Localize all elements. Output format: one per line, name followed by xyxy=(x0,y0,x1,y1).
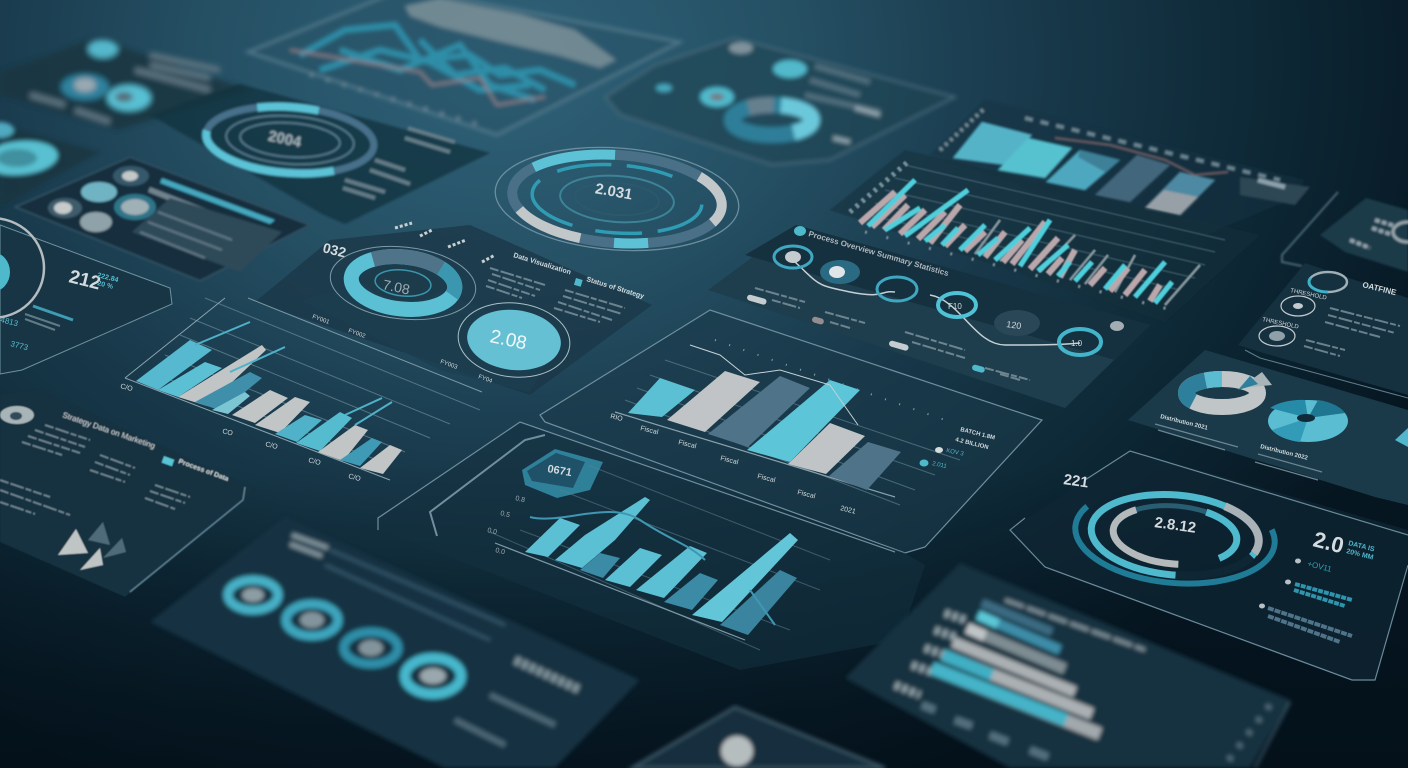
panel: left stats: 222.84 xyxy=(97,272,119,284)
trend lines xyxy=(195,322,392,425)
node 6 xyxy=(1059,329,1101,355)
scale dots xyxy=(850,160,910,212)
stat: 2.0 xyxy=(1311,527,1347,558)
panel: left stats: 20 % xyxy=(97,280,114,291)
panel: central bar chart: Fiscal xyxy=(720,455,739,466)
panel: donut and big dial: FY002 xyxy=(347,328,367,340)
key xyxy=(162,456,174,466)
panel: central bar chart: Fiscal xyxy=(640,425,659,436)
rings xyxy=(1071,478,1279,592)
pie 1 xyxy=(1186,372,1272,407)
tag xyxy=(1240,177,1310,205)
panel: central bar chart: Fiscal xyxy=(797,489,816,500)
pie 2 xyxy=(1268,400,1348,442)
node 3 xyxy=(877,277,917,301)
notes block one: Data Visualization xyxy=(512,252,572,276)
axis labels: FY001 xyxy=(311,314,331,326)
pink spikes xyxy=(860,192,1160,301)
heading xyxy=(290,535,328,556)
axis labels: RIO xyxy=(610,413,624,423)
panel: bottom partial card xyxy=(632,707,885,768)
gray spikes xyxy=(930,215,1200,305)
x labels xyxy=(922,705,1048,757)
legend: BATCH 1.8M xyxy=(960,427,995,442)
panel: flow process xyxy=(708,225,1150,408)
panel: right icon list: THRESHOLD xyxy=(1262,317,1300,331)
panel: donut and big dial: FY04 xyxy=(477,374,493,385)
panel: top-left mini dashboard xyxy=(0,38,250,130)
ring value: 2004 xyxy=(267,128,303,151)
panel: flow process: F10 xyxy=(948,302,962,311)
ring 4 xyxy=(405,658,461,694)
panel: lower bar chart xyxy=(378,422,925,670)
panel: flow process: 120 xyxy=(1006,319,1022,331)
map red route xyxy=(290,50,545,105)
panel: right ring gauge: 20% MM xyxy=(1346,548,1374,562)
partial ring xyxy=(0,218,44,318)
panel: pie charts: Distribution 2022 xyxy=(1260,444,1309,462)
panel: left bar chart: CO xyxy=(222,428,234,438)
status dot xyxy=(1110,321,1124,331)
heading: Strategy Data on Marketing xyxy=(61,410,156,451)
panel: central bar chart: KOV 3 xyxy=(946,448,965,458)
cyan spikes xyxy=(868,180,1172,303)
panel: right ring gauge: +OV11 xyxy=(1307,559,1333,574)
table bars xyxy=(160,178,275,224)
headings: OATFINE xyxy=(1362,280,1398,297)
panel: top-center donut xyxy=(605,38,955,165)
stat: 212 xyxy=(67,266,103,295)
node 5 xyxy=(994,310,1040,336)
panel: ring overview xyxy=(150,84,490,224)
panel: right icon list: THRESHOLD xyxy=(1290,288,1328,302)
donut xyxy=(327,240,479,326)
panel: right ring gauge: DATA IS xyxy=(1348,540,1375,553)
panel: pie charts xyxy=(1128,350,1408,505)
panel: bottom ring list xyxy=(150,517,640,768)
panel: central bar chart xyxy=(540,310,1042,553)
corner value: 221 xyxy=(1062,471,1090,491)
panel: central bar chart: 2.011 xyxy=(932,461,948,470)
axis line xyxy=(248,298,482,392)
axis xyxy=(125,298,390,480)
y labels xyxy=(895,613,965,695)
text xyxy=(805,66,880,112)
panel: left bar chart: C/O xyxy=(265,441,279,451)
panel: central bar chart: Fiscal xyxy=(678,439,697,450)
top ticks xyxy=(715,340,945,420)
grid xyxy=(490,465,830,650)
labels: 4813 xyxy=(0,315,19,328)
panel: donut and big dial xyxy=(248,223,652,395)
captions: Distribution 2021 xyxy=(1160,414,1209,432)
dial value: 2.08 xyxy=(488,326,529,354)
panel: top-right column chart xyxy=(930,100,1310,235)
panel: left stats xyxy=(0,218,172,374)
panel: flow process: 1.0 xyxy=(1071,339,1083,348)
inner segments xyxy=(530,159,704,239)
panel: left stats: 3773 xyxy=(10,339,29,352)
bars xyxy=(136,340,212,390)
axis labels: C/O xyxy=(120,383,134,393)
panel: right ring gauge xyxy=(1010,450,1408,680)
panel: icon circles and table xyxy=(15,157,310,281)
footer items xyxy=(746,294,767,305)
central ring gauge xyxy=(492,140,742,258)
ring 3 xyxy=(344,632,398,664)
panel: donut and big dial: Status of Strategy xyxy=(585,276,645,300)
ring gauge xyxy=(204,101,376,179)
cut-off icon xyxy=(1395,428,1408,447)
chips xyxy=(773,60,807,78)
panel: top map xyxy=(248,0,680,135)
map teal routes xyxy=(300,25,575,100)
panel: notes with triangles xyxy=(0,390,255,597)
icon circles xyxy=(113,166,149,186)
panel: left bar chart xyxy=(120,298,480,483)
panel: right top fragment xyxy=(1282,192,1408,272)
axis dots xyxy=(865,232,1180,312)
bars xyxy=(525,518,580,557)
trend line xyxy=(690,345,858,425)
bullets xyxy=(1295,558,1301,564)
axis xyxy=(495,543,745,640)
small cyan ellipse xyxy=(88,40,118,58)
panel: left bar chart: C/O xyxy=(348,473,362,483)
small figures xyxy=(395,223,495,262)
text blocks xyxy=(0,425,190,515)
axis labels: 0.0 xyxy=(495,547,506,556)
notes block two xyxy=(574,278,583,287)
panel: dense spike chart xyxy=(830,150,1260,322)
trend xyxy=(1055,138,1228,175)
header dot xyxy=(794,226,806,236)
grid xyxy=(150,298,480,465)
dial xyxy=(454,297,574,383)
side text xyxy=(515,660,580,690)
grid xyxy=(865,165,1225,290)
ring 2 xyxy=(286,604,338,636)
avatar icon xyxy=(0,406,34,424)
ring notes xyxy=(343,128,455,198)
panel: left edge gauge xyxy=(0,122,100,207)
badge xyxy=(522,449,603,498)
panel: central bar chart: 2021 xyxy=(840,505,856,516)
ring 1 xyxy=(228,580,278,610)
node 2 xyxy=(820,260,860,284)
panel: right icon list xyxy=(1238,263,1408,398)
bars xyxy=(628,378,695,417)
panel: donut and big dial: FY003 xyxy=(439,359,459,371)
panel: left bar chart: C/O xyxy=(308,457,322,467)
text xyxy=(1304,308,1400,356)
connector xyxy=(795,262,1080,345)
badge value: 0671 xyxy=(546,463,573,479)
notes xyxy=(33,306,73,320)
icons xyxy=(1309,272,1347,292)
panel: lower bar chart: 0.0 xyxy=(487,527,498,536)
inner bracket xyxy=(430,435,545,536)
small donut xyxy=(61,74,109,100)
donut value: 7.08 xyxy=(381,276,412,298)
bars xyxy=(982,603,1052,632)
grid xyxy=(625,360,960,505)
node 1 xyxy=(774,246,812,268)
triangles xyxy=(58,529,88,555)
donut xyxy=(732,105,812,135)
columns xyxy=(953,122,1032,165)
cyan donut xyxy=(107,85,151,111)
panel: central bar chart: Fiscal xyxy=(757,473,776,484)
heading: Process Overview Summary Statistics xyxy=(807,229,950,278)
panel: lower bar chart: 0.5 xyxy=(500,510,511,519)
panel: horizontal bar chart xyxy=(845,563,1290,768)
map landmass xyxy=(405,0,616,68)
axis xyxy=(615,412,895,497)
ring value: 2.8.12 xyxy=(1153,514,1197,537)
node 4 xyxy=(938,293,976,317)
panel: notes with triangles: Process of Data xyxy=(177,458,230,483)
heading xyxy=(1005,600,1145,650)
panel: central bar chart: 4.2 BILLION xyxy=(955,437,989,451)
globe icon xyxy=(721,736,753,766)
text lines xyxy=(30,55,220,122)
value 032: 032 xyxy=(321,239,348,261)
side dots xyxy=(1225,705,1270,765)
outer segments xyxy=(509,148,725,250)
trend line xyxy=(530,512,775,625)
panel: lower bar chart: 0.8 xyxy=(515,495,526,504)
ring value: 2.031 xyxy=(594,180,634,204)
